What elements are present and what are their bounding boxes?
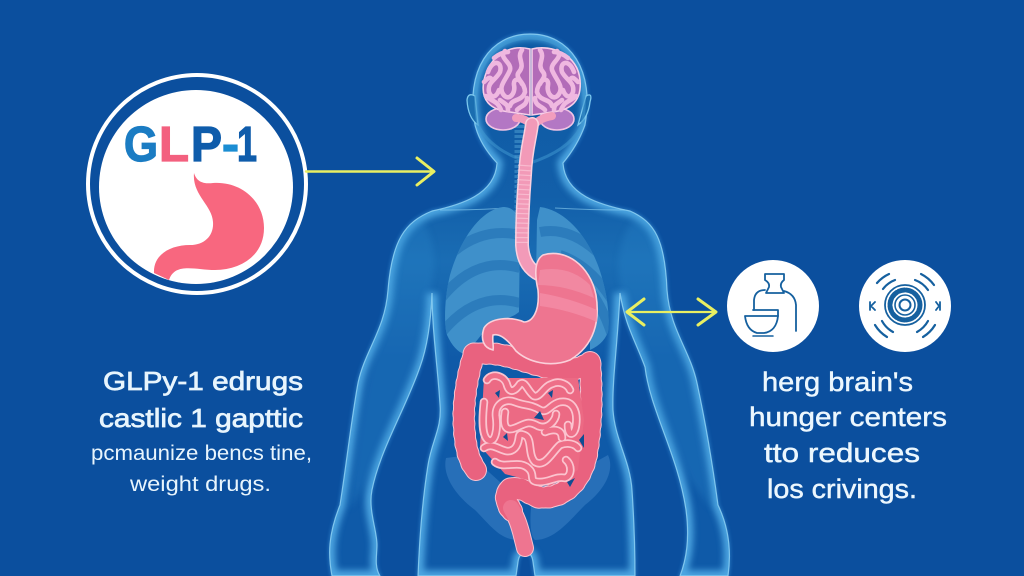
left body: weight drugs. [129,473,271,496]
left body: pcmaunize bencs tine, [91,442,312,465]
spine [514,125,526,250]
left text block [91,366,312,496]
GLP-1 logotype: G [124,118,158,172]
left heading: castlic 1 gapttic [99,403,303,433]
right text block: hunger centers [749,402,947,432]
right text block: los crivings. [767,474,917,504]
stomach icon [154,173,264,280]
lower lobes [486,108,574,130]
icon: concentric brain target [859,260,951,352]
brain [483,48,580,130]
arrow: badge to body [306,158,434,185]
shoulder line [440,208,625,210]
GLP-1 logotype: - [222,118,239,172]
esophagus [516,116,552,275]
GLP-1 logotype: 1 [237,118,257,172]
GLP-1 badge [88,75,306,293]
large intestine [464,353,591,548]
human body figure [330,34,729,576]
right text block: herg brain's [762,367,913,397]
cerebrum right [532,48,580,115]
GLP-1 logotype [124,118,257,172]
badge ring [88,75,306,293]
right text block: tto reduces [764,438,920,468]
double arrow: body to icons [627,299,716,325]
pelvis [445,455,610,540]
badge white disc [99,90,293,284]
head inner ring [476,38,584,163]
small intestine [480,376,584,487]
left heading [99,366,303,433]
GLP-1 logotype: P [191,118,222,172]
body silhouette [330,34,729,576]
right text block [749,367,947,504]
ears [467,95,591,125]
icon: bottle and bowl [727,260,819,352]
GLP-1 logotype: L [159,118,189,172]
left heading: GLPy-1 edrugs [103,366,303,396]
stomach [482,253,597,364]
left body [91,442,312,496]
lungs [440,207,612,354]
cerebrum left [483,48,530,115]
